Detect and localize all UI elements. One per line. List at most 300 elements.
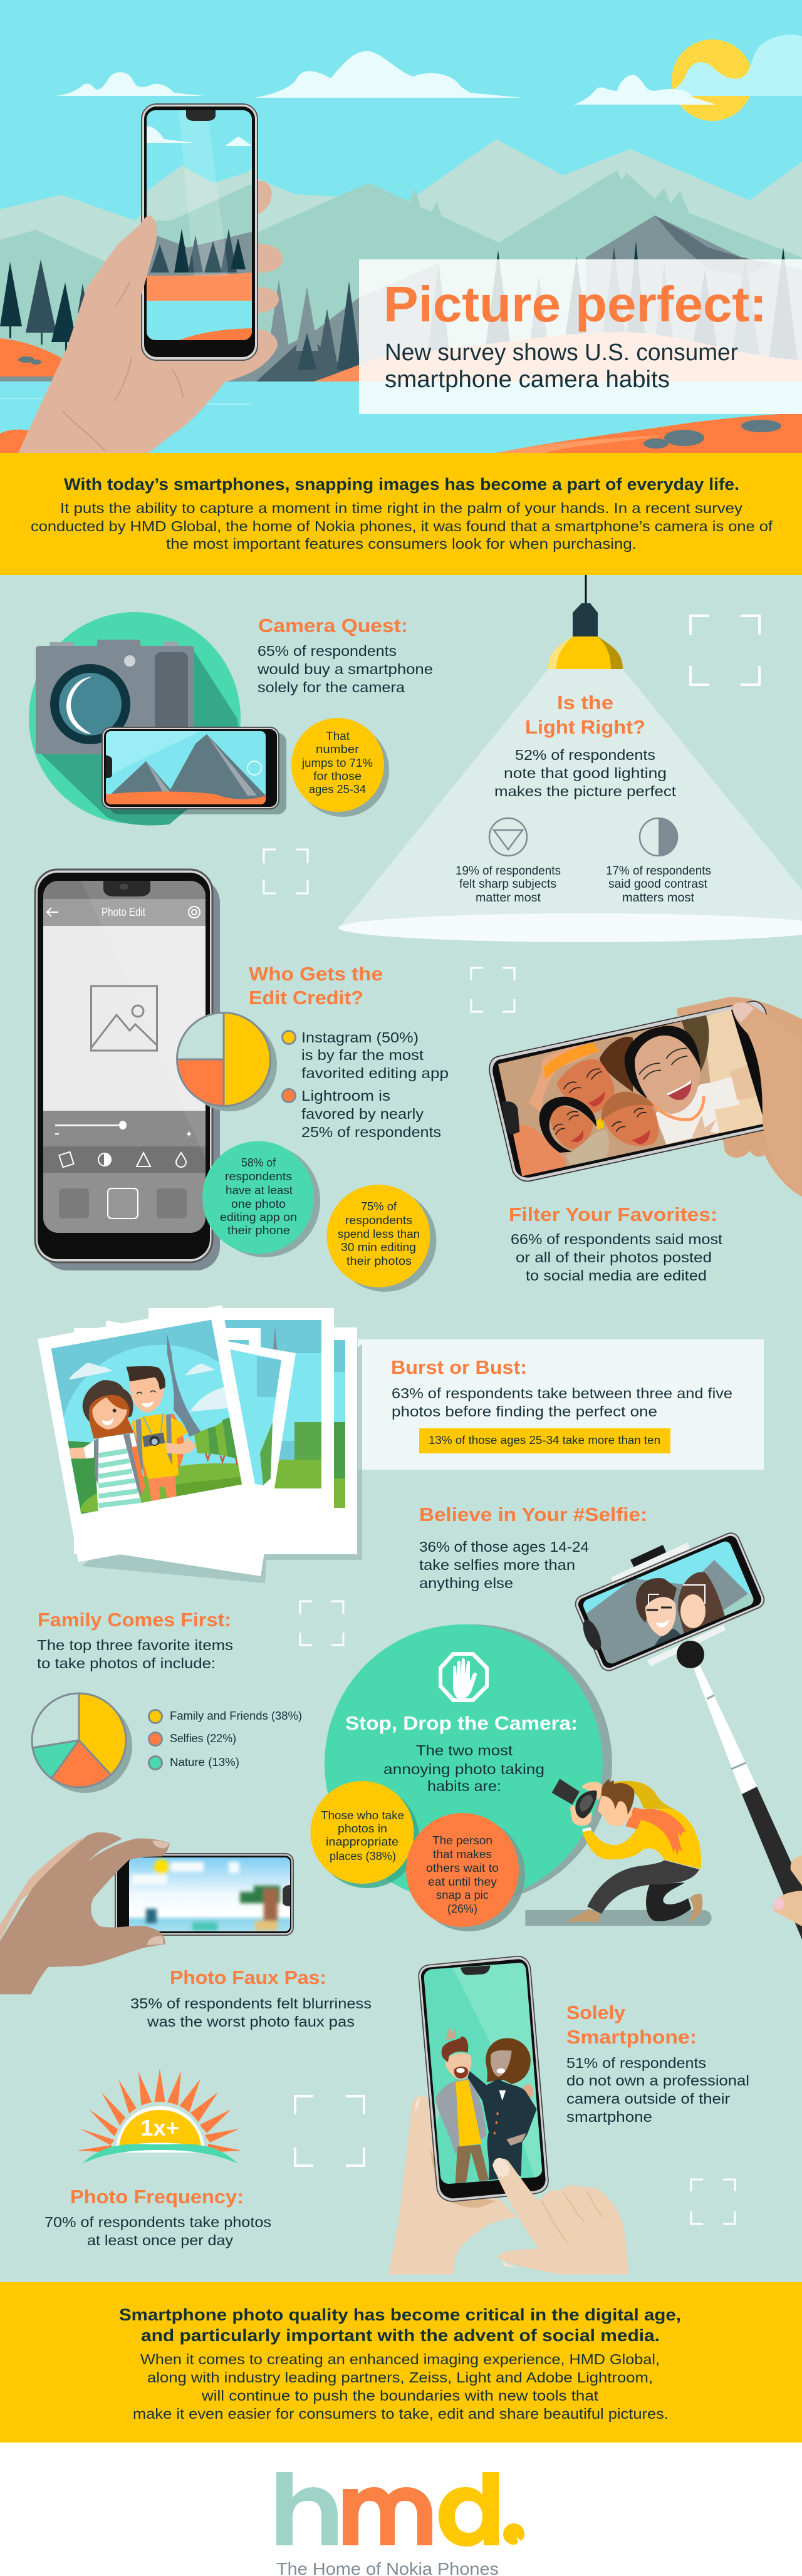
cloud left: [56, 72, 204, 96]
front leg: [587, 1860, 699, 1914]
boy head: [603, 1092, 659, 1146]
legend: instagram: [282, 1029, 449, 1081]
text: filter your favorites: 66% of respondents said most: [511, 1231, 722, 1247]
man pants: [456, 2144, 489, 2183]
legend: instagram: favorited editing app: [301, 1065, 449, 1081]
foreground stones: [643, 420, 781, 449]
camera: [36, 640, 194, 754]
heading: edit credit: Who Gets the: [249, 963, 383, 985]
text: camera quest: [257, 643, 433, 695]
back mountains: [0, 139, 802, 261]
woman hair: [678, 1572, 733, 1654]
title: Picture perfect:: [383, 276, 767, 332]
conclusion heading: and particularly important with the advent of social media.: [141, 2326, 660, 2345]
head: [598, 1796, 632, 1826]
phone notch: [186, 110, 216, 121]
text: believe in your selfie: anything else: [419, 1575, 513, 1591]
focus bracket solely: [691, 2179, 735, 2224]
beard: [454, 2067, 468, 2079]
callout: ages 25-34: 13% of those ages 25-34 take more than ten: [429, 1433, 660, 1446]
light beam: [338, 669, 802, 928]
pie chart: favorite items: [32, 1693, 132, 1793]
panel: hero landscape: [0, 0, 802, 453]
phone body: [144, 106, 255, 357]
icon: settings gear: [189, 906, 200, 918]
notch: [283, 1885, 290, 1906]
legend: lightroom: favored by nearly: [301, 1106, 424, 1122]
letter h: [276, 2472, 338, 2545]
heading: edit credit: [249, 963, 383, 1009]
landscape phone shadow: [110, 733, 286, 814]
bubble: 58 percent: their phone: [227, 1223, 290, 1237]
icon: contrast: [640, 818, 677, 856]
woman straps: [94, 1433, 143, 1497]
footer background: [0, 2443, 802, 2576]
text: sharp subjects: matter most: [476, 891, 541, 905]
legend: favorite items: [149, 1709, 302, 1769]
hands: [570, 1782, 602, 1826]
bubble: 75 percent: 30 min editing: [341, 1240, 416, 1254]
heading: solely smartphone: Solely: [566, 2002, 626, 2023]
bubble: 75 percent: their photos: [346, 1254, 412, 1267]
trees centre: [268, 241, 799, 370]
thumb highlight: [415, 2097, 420, 2111]
lamp cord: [585, 575, 586, 603]
woman arm: [69, 1447, 93, 1458]
pole bands: [707, 1695, 746, 1769]
sun: [672, 39, 753, 121]
selfie scene: [495, 1009, 766, 1178]
lamp shade: [548, 636, 623, 669]
heading: photo faux pas: Photo Faux Pas:: [170, 1966, 326, 1988]
man head: [130, 1376, 164, 1413]
man shirt: [132, 1414, 188, 1480]
phone: [142, 104, 258, 360]
hair: [602, 1779, 634, 1815]
text: sharp subjects: [456, 864, 561, 905]
fingers and index finger: [492, 2159, 628, 2275]
heading: solely smartphone: [566, 2002, 697, 2048]
conclusion text: will continue to push the boundaries with new tools that: [201, 2387, 599, 2404]
stripes: [98, 1451, 141, 1505]
text: sharp subjects: 19% of respondents: [456, 864, 561, 878]
blurry scene: [128, 1857, 291, 1931]
text: good contrast: 17% of respondents: [606, 864, 711, 878]
sun dome: [119, 2110, 201, 2148]
backpack straps: [136, 1414, 172, 1470]
shore highlight: [496, 435, 664, 453]
middle mountains: [0, 170, 802, 358]
panel: intro band: [0, 453, 802, 575]
conclusion text: When it comes to creating an enhanced imaging experience, HMD Global,: [140, 2351, 660, 2367]
legend: lightroom: Lightroom is: [301, 1088, 390, 1104]
bubble: wait to eat: (26%): [447, 1902, 477, 1915]
heading: is the light right: Is the: [557, 692, 613, 714]
hat: [528, 1045, 600, 1113]
text: sharp subjects: felt sharp subjects: [459, 877, 556, 891]
palm: [388, 2096, 518, 2275]
icon: stop hand: [439, 1652, 489, 1702]
text: family comes first: to take photos of include:: [37, 1655, 216, 1671]
photo stack: [38, 1305, 362, 1583]
bubble: 75 percent: spend less than: [338, 1227, 420, 1240]
icon: sun with frequency: [76, 2069, 242, 2164]
phone scene: [420, 1961, 545, 2186]
lens: [50, 664, 130, 744]
photo scene: [50, 1317, 261, 1537]
heading: filter your favorites: Filter Your Favorites:: [509, 1203, 717, 1225]
camera top: [580, 1795, 593, 1812]
sun rays: [76, 2069, 242, 2153]
thumbnails: [59, 1188, 187, 1218]
camera strap: [143, 1414, 163, 1433]
thumb: [129, 216, 157, 294]
text: annoying habits: The two most: [416, 1742, 513, 1758]
intro text: [31, 500, 773, 552]
woman blouse: [499, 2090, 506, 2101]
phone frame: [489, 1001, 766, 1181]
back arrow: [47, 908, 58, 917]
grey mountain left: [222, 263, 439, 382]
text: filter your favorites: or all of their photos posted: [516, 1249, 712, 1265]
man smile: [142, 1401, 154, 1407]
ground: [67, 1441, 98, 1514]
intro text: conducted by HMD Global, the home of Nokia phones, it was found that a smartphone’s camera is one of: [31, 518, 773, 534]
text: camera quest: solely for the camera: [258, 679, 405, 695]
intro text: the most important features consumers look for when purchasing.: [166, 536, 637, 552]
panel: filter phone with selfie: [489, 997, 802, 1197]
text: family comes first: The top three favorite items: [37, 1637, 233, 1653]
selfie phone: [564, 1522, 777, 1691]
bubble: wait to eat: that makes: [433, 1847, 492, 1861]
bottom thumb highlight: [501, 2262, 518, 2268]
left shore stones: [0, 356, 56, 382]
man hair: [636, 1578, 677, 1623]
heading: is the light right: Light Right?: [525, 716, 645, 738]
camera dot: [120, 884, 128, 890]
panel: blurry phone: [0, 1832, 293, 1994]
subtitle: [385, 340, 738, 393]
woman hair: [89, 1395, 133, 1439]
app title: Photo Edit: [102, 906, 145, 918]
man legs: [148, 1476, 177, 1502]
text: solely smartphone: smartphone: [566, 2109, 652, 2125]
handle: [742, 1787, 802, 1940]
man body: [648, 1629, 687, 1685]
intro text: It puts the ability to capture a moment in time right in the palm of your hands. In a recent survey: [60, 500, 742, 516]
circle shadow: [334, 1624, 612, 1903]
back photo right: [139, 1327, 357, 1554]
text: believe in your selfie: take selfies more than: [419, 1557, 575, 1573]
bubble: 58 percent: editing app on: [220, 1210, 297, 1223]
cloud right: [574, 75, 716, 105]
legend: lightroom: [282, 1088, 441, 1140]
sun halo: [112, 2102, 209, 2155]
yellow bubble: for those: [313, 769, 362, 782]
thumb nail: [733, 1002, 754, 1022]
woman face: [92, 1398, 127, 1430]
man face: [645, 1597, 676, 1636]
phone body: [117, 1856, 291, 1933]
fingernail: [774, 1898, 784, 1910]
clouds: [69, 1363, 236, 1411]
bubble: 75 percent: respondents: [345, 1213, 412, 1227]
text: believe in your selfie: [419, 1539, 589, 1591]
tower: [167, 1334, 202, 1436]
pie chart: editing apps: [177, 1012, 277, 1111]
phone frame: [419, 1956, 548, 2201]
shirt of father: [656, 1076, 741, 1145]
text: light stats: note that good lighting: [504, 765, 667, 781]
text: burst or bust: 63% of respondents take between three and five: [392, 1385, 732, 1401]
green circle: [325, 1624, 603, 1903]
camera shadow: [41, 652, 239, 826]
torso and arm: [582, 1809, 701, 1869]
heading: camera quest: Camera Quest:: [258, 615, 408, 636]
heading: is the light right: [525, 692, 645, 738]
phone body: [421, 1959, 546, 2198]
girl: [566, 1130, 609, 1165]
reflection: [81, 881, 206, 1159]
yellow bubble: jumps to 71%: [301, 756, 373, 769]
woman smile: [102, 1418, 113, 1425]
man jacket: [435, 2079, 487, 2154]
flash: [124, 655, 135, 667]
horizon arc: [82, 2144, 238, 2164]
black phone end: [747, 1036, 761, 1084]
back photo middle: [148, 1308, 334, 1535]
camera lens: [552, 1779, 580, 1805]
thumb over phone: [732, 1002, 802, 1195]
heading: solely smartphone: Smartphone:: [566, 2026, 697, 2048]
bubble: 75 percent: [327, 1185, 436, 1292]
panel: camera quest illustration: [29, 612, 389, 826]
large pale cloud: [674, 34, 802, 96]
mother face: [556, 1059, 615, 1113]
woman hair: [486, 2038, 531, 2084]
conclusion text: along with industry leading partners, Zeiss, Light and Adobe Lightroom,: [147, 2369, 653, 2386]
panel: stop drop the camera: [311, 1624, 612, 1931]
front shoe: [568, 1909, 600, 1921]
bubble: inappropriate places: photos in: [338, 1822, 387, 1835]
trees: [194, 1418, 237, 1465]
focus bracket left: [264, 849, 308, 893]
conclusion text: [133, 2351, 669, 2422]
sleeve cuff: [582, 1827, 591, 1832]
yellow bubble: number: [316, 742, 359, 756]
text: burst or bust: [392, 1385, 732, 1420]
woman hip hand: [506, 2133, 526, 2146]
focus bracket top right: [690, 616, 759, 685]
man hair: [442, 2037, 468, 2062]
father face: [634, 1031, 700, 1114]
man arm: [166, 1436, 195, 1454]
conclusion text: make it even easier for consumers to take, edit and share beautiful pictures.: [133, 2406, 669, 2422]
woman jacket: [468, 2070, 537, 2180]
back leg: [646, 1883, 691, 1921]
sun label: 1x+: [140, 2115, 179, 2141]
hand holding phone: [18, 181, 283, 453]
focus bracket family: [300, 1601, 343, 1645]
callout: ages 25-34: [419, 1428, 670, 1453]
heading: edit credit: Edit Credit?: [249, 987, 363, 1009]
phone body: [576, 1534, 764, 1670]
ground shadow: [525, 1910, 712, 1926]
selfie scene: [564, 1522, 777, 1691]
camera body: [575, 1790, 597, 1819]
hand on handle: [773, 1856, 802, 1926]
brown hair: [600, 1037, 633, 1092]
bubble: 75 percent: 75% of: [361, 1200, 397, 1213]
man hair: [127, 1366, 165, 1389]
dark mountain left: [256, 344, 346, 382]
text: good contrast: said good contrast: [608, 877, 708, 891]
edit app screen: [43, 881, 206, 1233]
hand: [0, 1832, 170, 1994]
bubble: wait to eat: others wait to: [426, 1861, 499, 1874]
clamp bottom: [647, 1624, 726, 1666]
phone body: [38, 873, 210, 1259]
phone frame: [142, 104, 258, 360]
text: believe in your selfie: 36% of those ages 14-24: [419, 1539, 589, 1555]
man shirt: [456, 2080, 481, 2147]
woman hat: [83, 1380, 133, 1422]
legend: favorite items: Selfies (22%): [170, 1732, 236, 1745]
bubble: inappropriate places: inappropriate: [326, 1835, 398, 1848]
bubble: wait to eat: [406, 1813, 525, 1931]
hand in scene: [730, 1063, 760, 1101]
back shoe: [688, 1894, 702, 1921]
logo dot: [503, 2523, 524, 2545]
clamp ball: [677, 1641, 704, 1668]
panel: lamp and light beam: [338, 575, 802, 942]
heading: family comes first: Family Comes First:: [38, 1609, 231, 1631]
letter d: [439, 2472, 499, 2547]
text: good contrast: matters most: [622, 891, 695, 905]
scarf: [625, 1807, 686, 1856]
grey mountain right shade: [655, 216, 751, 259]
man mouth: [456, 2068, 465, 2073]
back of hand highlight: [0, 1837, 83, 1940]
back photo third: [74, 1328, 261, 1554]
mouth: [656, 1619, 669, 1628]
shadow: [81, 1344, 362, 1583]
bubble: inappropriate places: places (38%): [330, 1849, 396, 1862]
clamp top black: [630, 1545, 668, 1572]
light pool: [338, 913, 802, 942]
text: light stats: [494, 747, 677, 799]
front photo: [38, 1305, 263, 1562]
conclusion heading: Smartphone photo quality has become critical in the digital age,: [119, 2305, 681, 2324]
text: photo faux pas: [130, 1995, 372, 2030]
screen reflection: [451, 1961, 545, 2178]
grey mountain right: [586, 216, 802, 376]
panel: burst or bust: [358, 1339, 764, 1470]
photographer: [525, 1779, 712, 1926]
shore behind box: [313, 332, 802, 382]
text: photo faux pas: was the worst photo faux pas: [147, 2013, 355, 2030]
man arm left: [435, 2102, 440, 2122]
slider: [55, 1121, 191, 1136]
text: photo faux pas: 35% of respondents felt blurriness: [130, 1995, 372, 2012]
heading: believe in your selfie: Believe in Your #Selfie:: [419, 1504, 647, 1525]
text: good contrast: [606, 864, 711, 905]
left shore: [0, 338, 62, 377]
sky: [0, 0, 802, 221]
jacket buttons: [494, 2112, 499, 2134]
landscape phone: [102, 727, 279, 809]
legend: instagram: Instagram (50%): [301, 1029, 419, 1046]
icon: triangle filter: [489, 818, 527, 856]
yellow bubble: ages 25-34: [309, 782, 366, 796]
legend: lightroom: 25% of respondents: [301, 1124, 441, 1140]
icon: image placeholder: [91, 986, 157, 1051]
clamp top white: [611, 1542, 690, 1588]
subtitle: smartphone camera habits: [385, 366, 670, 393]
conclusion heading: [119, 2305, 681, 2345]
trees left: [0, 259, 88, 357]
notch: [461, 1965, 490, 1975]
panel: conclusion band: [0, 2282, 802, 2443]
peace fingers: [446, 2025, 456, 2040]
bubble: wait to eat: snap a pic: [436, 1888, 489, 1901]
pole white: [692, 1664, 757, 1794]
notch: [103, 881, 150, 896]
text: solely smartphone: do not own a professional: [566, 2072, 749, 2089]
yellow bubble: [291, 718, 389, 817]
foreground shore left: [0, 430, 31, 453]
selfie stick: [692, 1664, 802, 1940]
text: light stats: 52% of respondents: [515, 747, 655, 763]
text: solely smartphone: 51% of respondents: [566, 2055, 706, 2071]
legend: instagram: is by far the most: [301, 1047, 424, 1063]
photo paper: [38, 1305, 263, 1562]
lamp socket: [573, 603, 598, 636]
bubble: 58 percent: 58% of: [241, 1156, 276, 1169]
panel: photo edit phone: [35, 870, 220, 1270]
text: photo frequency: [44, 2214, 271, 2248]
phone frame: [573, 1530, 767, 1673]
heading: photo frequency: Photo Frequency:: [70, 2186, 244, 2208]
bubble: wait to eat: The person: [432, 1834, 492, 1847]
text: solely smartphone: [566, 2055, 749, 2125]
phone screen scene: [147, 110, 252, 340]
heading: burst or bust: Burst or Bust:: [391, 1356, 527, 1378]
lamp shade highlight: [548, 636, 573, 669]
hand holding blurry phone: [0, 1832, 170, 1994]
bubble: inappropriate places: Those who take: [321, 1809, 404, 1822]
cloud centre: [254, 51, 522, 98]
sun dome outline: [115, 2106, 205, 2153]
text: light stats: makes the picture perfect: [494, 783, 677, 799]
text: annoying habits: annoying photo taking: [383, 1761, 544, 1777]
camera grip: [155, 652, 188, 754]
text: camera quest: would buy a smartphone: [257, 661, 433, 677]
bubble: inappropriate places: [311, 1781, 419, 1888]
text: photo frequency: 70% of respondents take photos: [44, 2214, 271, 2230]
bubble: 58 percent: respondents: [225, 1170, 292, 1183]
hand creases: [63, 269, 183, 451]
woman small hand: [523, 2084, 533, 2099]
phone frame: [115, 1854, 293, 1935]
camera on chest: [142, 1433, 165, 1447]
phone frame: [35, 870, 212, 1262]
finger creases: [542, 2191, 603, 2243]
woman face: [491, 2050, 512, 2077]
yellow accent: [596, 1117, 603, 1130]
text: filter your favorites: to social media are edited: [526, 1267, 707, 1284]
phone shadow: [43, 878, 220, 1270]
